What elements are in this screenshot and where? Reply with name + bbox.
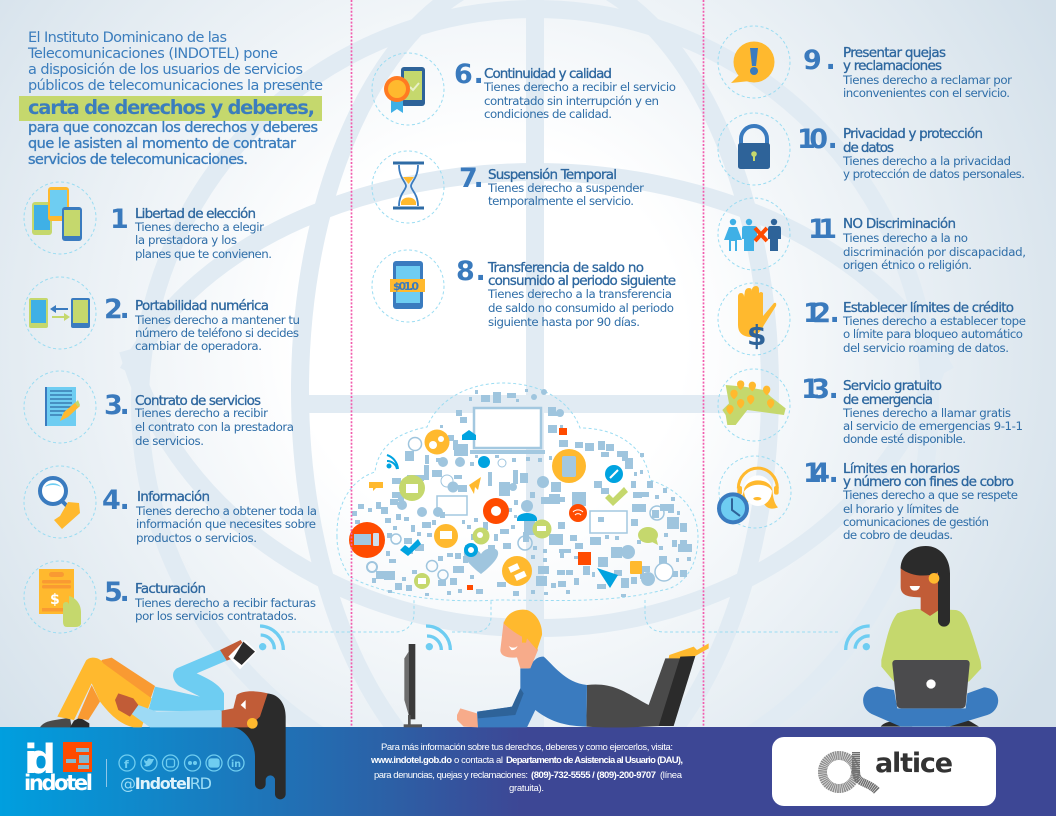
intro text: que le asisten al momento de contratar [28,136,296,152]
icon: invoice [24,561,96,633]
icon: map of Dominican Republic [718,369,790,441]
footer information text: para denuncias, quejas y reclamaciones: [374,770,528,781]
icon: balance phone: $01.0 [393,280,419,293]
intro text: carta de derechos y deberes, [28,96,315,119]
right 8: siguiente hasta por 90 días. [488,315,640,329]
right 8: Transferencia de saldo no [487,260,644,276]
wifi signal [846,626,870,650]
right 2: 2 [104,294,123,325]
right 9 [718,26,1012,100]
head [500,620,538,668]
right 13: . [828,374,839,405]
altice card [772,737,996,806]
icon: quality phone [372,53,444,125]
right 5: por los servicios contratados. [135,609,297,623]
right 12: del servicio roaming de datos. [843,341,1009,355]
right 13: Tienes derecho a llamar gratis [842,406,1011,420]
right 2: cambiar de operadora. [135,339,262,353]
social icons and handle [106,755,244,793]
right 4: información que necesites sobre [136,517,316,531]
right 1: 1 [110,204,129,235]
pants and shoes [669,643,709,659]
right 5: Tienes derecho a recibir facturas [134,596,316,610]
right 3: el contrato con la prestadora [135,420,294,434]
social icons and handle: f [124,758,129,771]
right 2: . [120,294,130,325]
torso [477,657,587,727]
right 14: Límites en horarios [843,461,960,477]
altice logo mark [822,752,877,791]
right 5: . [120,577,130,608]
illustration: woman with laptop [846,546,998,727]
intro text: servicios de telecomunicaciones. [28,152,248,168]
footer band [0,727,1056,816]
right 14: 14 [803,458,830,489]
right 4: Información [137,489,210,505]
right 3: 3 [104,390,123,421]
right 14: comunicaciones de gestión [843,515,989,529]
monitor [404,652,409,715]
right 10: . [828,124,838,155]
footer logo: indotel: indotel [24,771,93,795]
right 5: Facturación [135,581,206,597]
wifi signal [426,626,450,650]
right 3: de servicios. [135,434,204,448]
right 6: Continuidad y calidad [484,66,612,82]
right 9: Presentar quejas [843,45,946,61]
right 12: o límite para bloqueo automático [843,327,1023,341]
laptop [892,660,970,708]
right 12: Establecer límites de crédito [843,300,1014,316]
icon: complaint bubble [718,26,790,98]
icon: operator and clock [719,456,791,528]
footer information text: Para más información sobre tus derechos, deberes y como ejercerlos, visita: [381,742,673,753]
icon: phones [24,182,96,254]
right 3: Tienes derecho a recibir [134,406,268,420]
right 14: . [828,458,839,489]
hand [457,708,478,727]
right 2 [24,277,300,353]
right 11: NO Discriminación [843,216,956,232]
head [222,691,268,727]
footer information text [370,742,683,794]
footer information text: www.indotel.gob.do [370,755,452,766]
right 12: Tienes derecho a establecer tope [842,314,1026,328]
right 3: Contrato de servicios [135,393,261,409]
intro text: El Instituto Dominicano de las [28,30,227,46]
right 6: contratado sin interrupción y en [484,94,659,108]
right 8 [372,250,676,329]
shirt [881,609,981,682]
right 7: . [474,163,484,194]
right 13: al servicio de emergencias 9-1-1 [843,419,1023,433]
jeans [863,687,998,727]
footer logo: indotel [24,737,93,795]
right 8: Tienes derecho a la transferencia [487,287,672,301]
hair [233,693,286,799]
footer information text: o contacta al [454,755,503,766]
right 10: y protección de datos personales. [843,167,1025,181]
right 7: temporalmente el servicio. [488,194,634,208]
right 9: y reclamaciones [843,58,942,74]
right 8: . [476,256,486,287]
right 12: . [830,298,840,329]
right 2: Tienes derecho a mantener tu [134,313,300,327]
right 4: productos o servicios. [136,531,257,545]
footer logo: indotel: id [24,737,56,783]
right 6 [372,53,676,125]
right 4: . [120,485,130,516]
illustration: woman lying with phone [40,626,286,799]
illustration: person on floor with monitor [404,610,709,728]
right 11: 11 [808,214,837,245]
highlight [19,96,322,121]
right 10: 10 [797,124,828,155]
right 7: Suspensión Temporal [488,167,617,183]
right 6: Tienes derecho a recibir el servicio [483,80,676,94]
right 6: condiciones de calidad. [484,107,612,121]
icon: magnifier [24,466,96,538]
right 14: y número con fines de cobro [843,474,1014,490]
globe pattern [128,0,946,810]
right 10 [718,113,1025,185]
icon: invoice: $ [50,592,60,608]
right 14: Tienes derecho a que se respete [842,488,1018,502]
icon: people [718,198,790,270]
icon: padlock [718,113,790,185]
right 9: Tienes derecho a reclamar por [842,73,1012,87]
intro text: para que conozcan los derechos y deberes [28,120,318,136]
small icons [352,389,692,597]
footer information text: (línea [660,770,683,781]
page fold lines [352,0,704,816]
right 1: la prestadora y los [135,233,237,247]
right 5 [24,561,316,633]
cloud of icons [337,383,698,601]
intro text [19,30,323,168]
right 6: 6 [454,59,473,90]
shoes [881,721,912,727]
right 2: Portabilidad numérica [135,298,269,314]
right 13 [718,369,1023,446]
icon: balance phone [372,250,444,322]
right 11: discriminación por discapacidad, [843,245,1026,259]
connection lines [281,600,839,632]
right 13: Servicio gratuito [843,378,942,394]
right 5: 5 [104,577,123,608]
right 4: 4 [102,485,121,516]
right 13: 13 [801,374,830,405]
right 3 [24,371,294,448]
right 4 [24,466,317,545]
icon: hand with dollar: $ [747,319,766,352]
right 11: Tienes derecho a la no [842,231,968,245]
colored badges [349,428,658,590]
intro text: a disposición de los usuarios de servicios [28,62,303,78]
right 11 [718,198,1026,272]
altice card: altice [875,748,953,779]
right 7 [372,151,644,223]
right 9: 9 [803,45,822,76]
right 6: . [474,59,484,90]
right 14: de cobro de deudas. [843,528,953,542]
footer information text: (809)-732-5555 / (809)-200-9707 [531,770,656,781]
right 8: consumido al periodo siguiente [488,273,676,289]
right 9: . [826,45,836,76]
right 12: 12 [803,298,831,329]
hair [901,546,950,627]
intro text: Telecomunicaciones (INDOTEL) pone [27,46,278,62]
face [901,567,939,616]
right 7: 7 [459,163,478,194]
right 2: número de teléfono si decides [135,326,299,340]
right 7: Tienes derecho a suspender [487,181,644,195]
right 14 [719,456,1018,542]
right 10: de datos [843,140,894,156]
right 4: Tienes derecho a obtener toda la [135,504,317,518]
icon: hand with dollar [718,283,790,355]
right 10: Tienes derecho a la privacidad [842,154,1011,168]
wifi signal [260,626,283,650]
icon: portability [24,277,96,349]
footer information text: Departamento de Asistencia al Usuario (DAU), [506,755,683,766]
right 10: Privacidad y protección [843,126,983,142]
right 11: origen étnico o religión. [843,258,972,272]
footer information text: gratuita). [509,783,544,794]
right 8: de saldo no consumido al periodo [488,301,674,315]
right 8: 8 [456,256,475,287]
social icons and handle: in [231,759,241,770]
icon: hourglass [372,151,444,223]
right 13: de emergencia [843,392,933,408]
right 9: inconvenientes con el servicio. [843,86,1010,100]
monitors [437,496,627,533]
right 14: el horario y límites de [843,502,959,516]
right 13: donde esté disponible. [843,432,966,446]
intro text: públicos de telecomunicaciones la presente [28,78,323,94]
laptop [470,408,545,454]
social icons and handle: @IndotelRD [120,774,212,793]
right 3: . [120,390,130,421]
right 1: planes que te convienen. [135,247,272,261]
right 1: Tienes derecho a elegir [134,220,264,234]
icon: contract [24,371,96,443]
right 1: Libertad de elección [135,206,256,222]
right 1 [24,182,272,261]
cloud outline [337,383,698,601]
right 12 [718,283,1026,355]
